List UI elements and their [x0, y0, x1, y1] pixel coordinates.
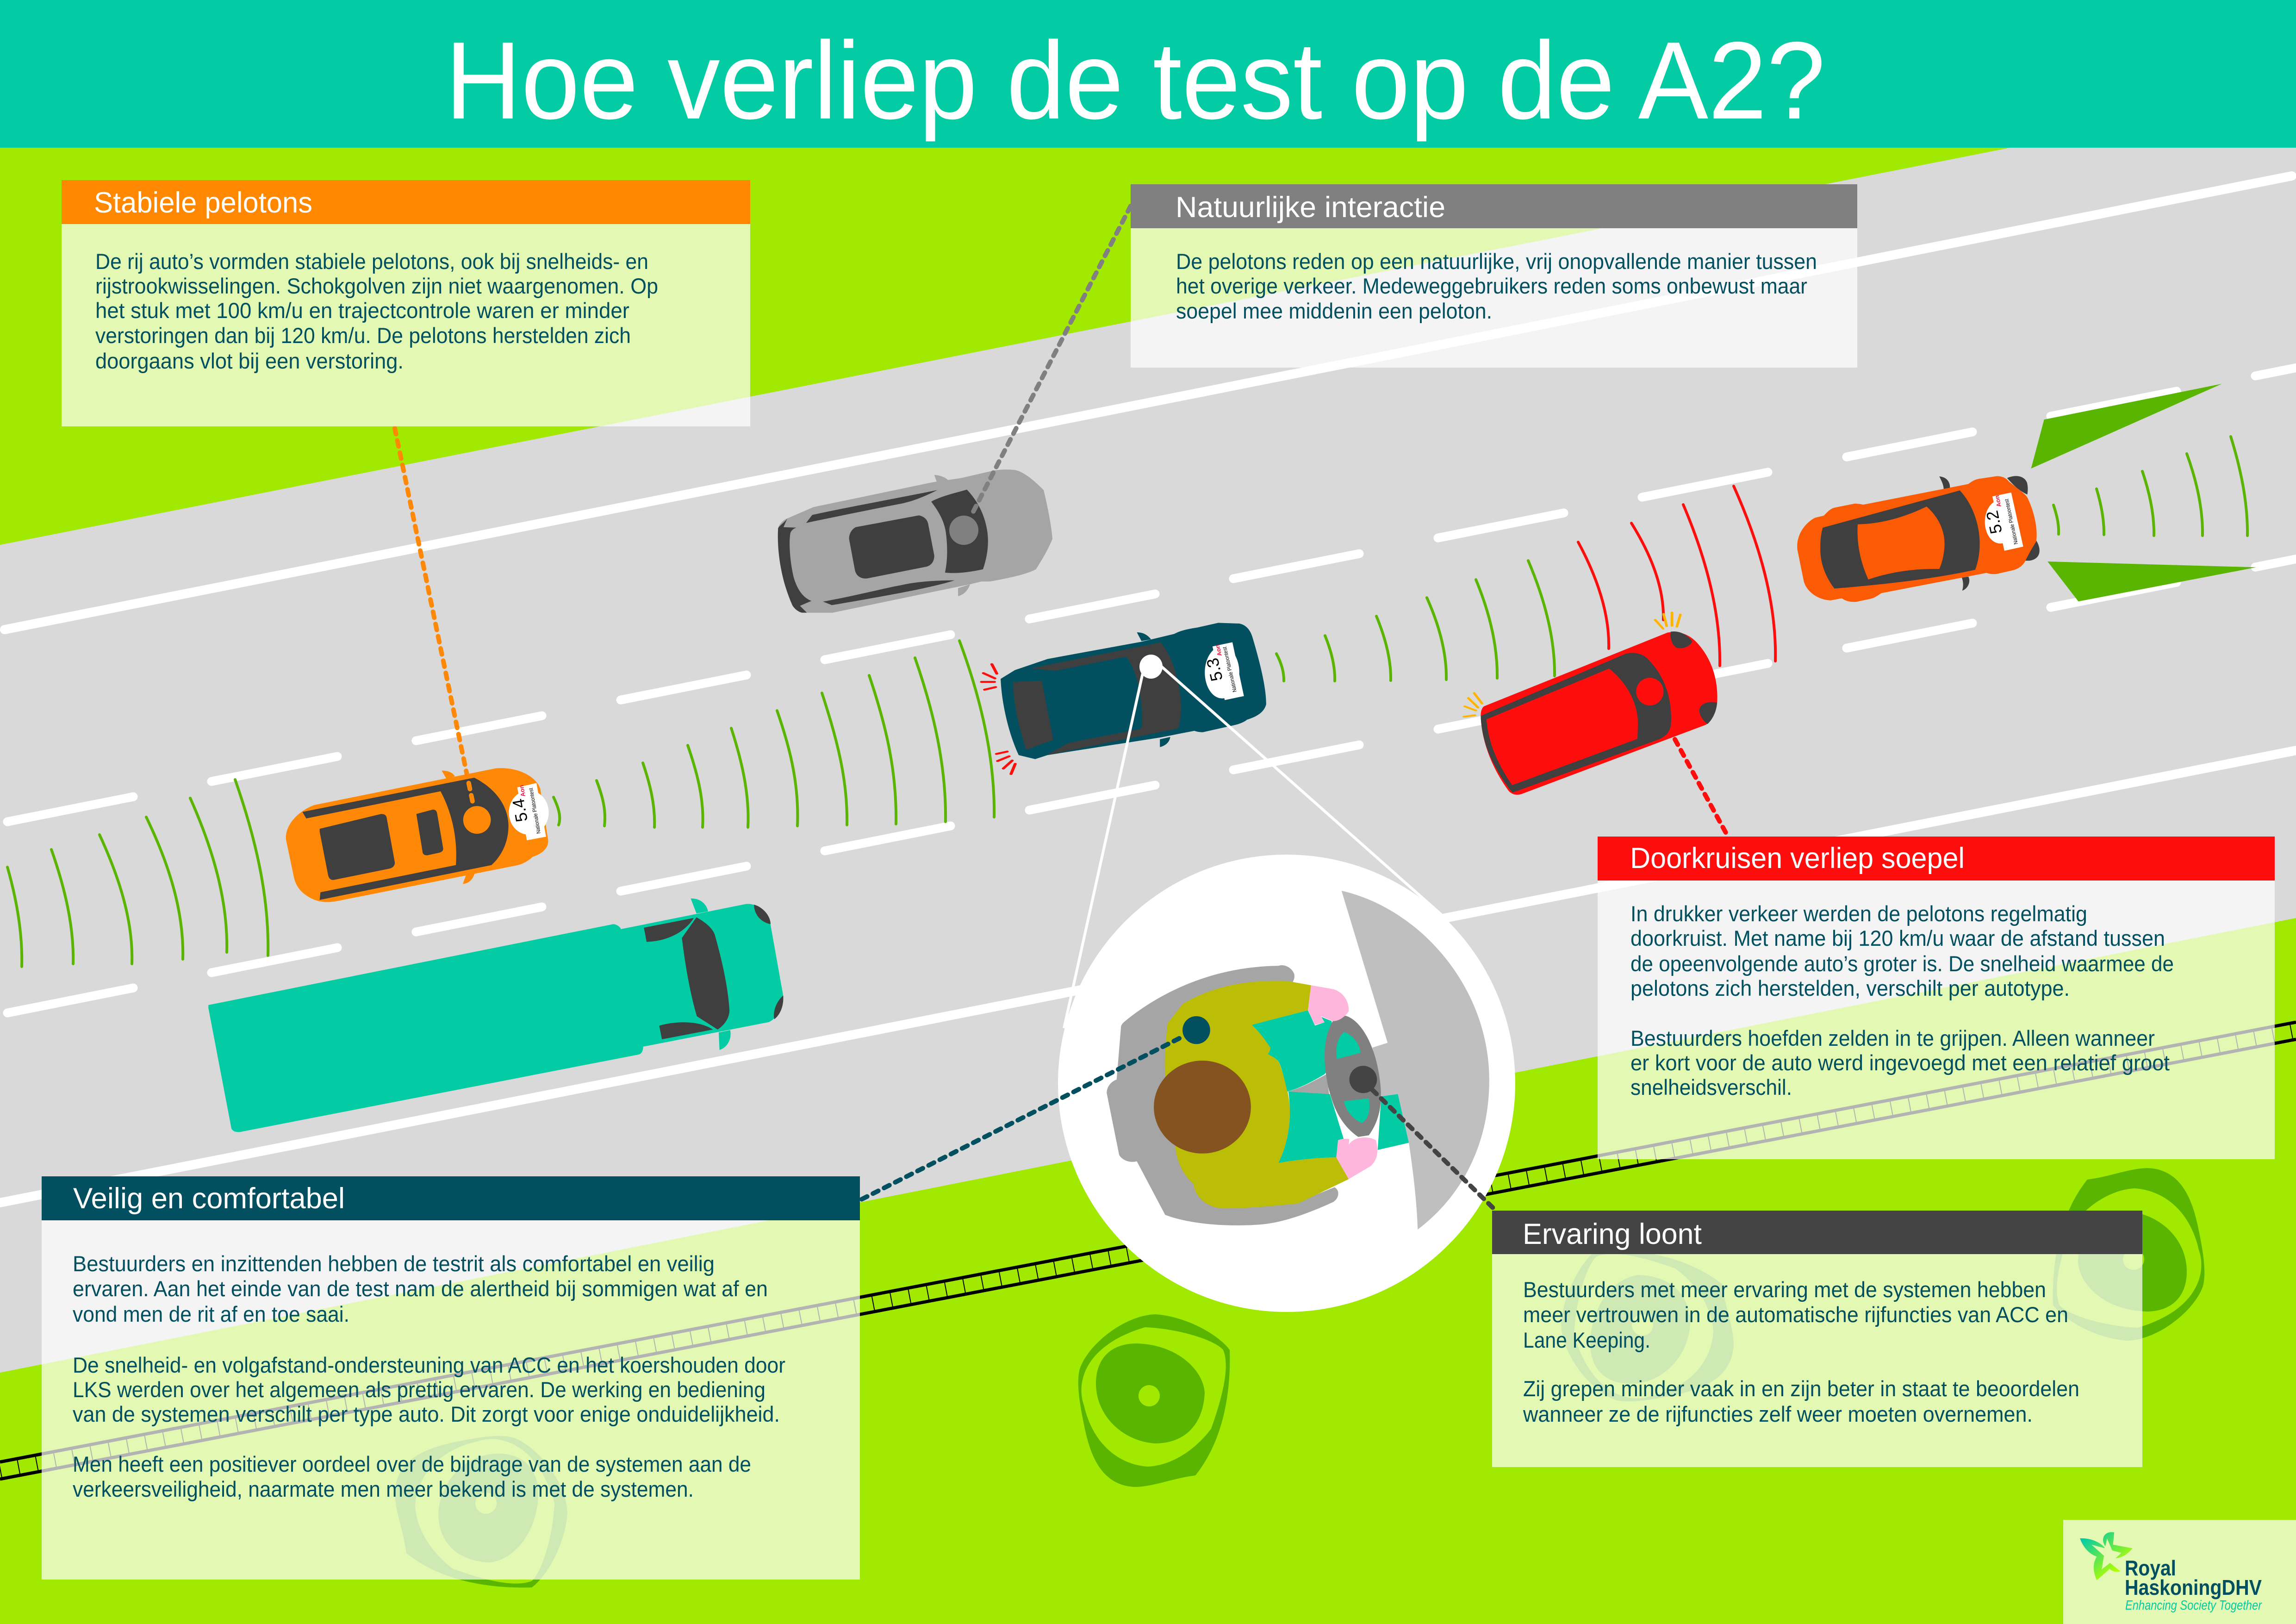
sensor waves: left of orange car: [7, 780, 268, 967]
vehicle: orange car 5.4: 5.4: [509, 797, 531, 824]
vehicle: orange car 5.4: Nationale Platoontest: [528, 787, 542, 834]
panel: natuurlijke interactie: soepel mee middenin een peloton.: [1176, 299, 1492, 323]
panel: stabiele pelotons: Stabiele pelotons: [94, 187, 312, 219]
panel: veilig en comfortabel: ervaren. Aan het einde van de test nam de alertheid bij sommigen wat af en: [73, 1276, 768, 1301]
road surface: [0, 91, 2296, 1373]
road markings: [0, 176, 2296, 1203]
warning waves: red: [1578, 486, 1775, 666]
leader line: stabiele pelotons: [395, 428, 473, 804]
railway fence: [0, 1022, 2296, 1479]
panel: doorkruisen verliep soepel: snelheidsverschil.: [1630, 1075, 1792, 1099]
sensor waves: front of lead car: [2053, 437, 2247, 536]
tree 4: [2053, 1168, 2204, 1341]
panel: ervaring loont: Bestuurders met meer ervaring met de systemen hebben: [1523, 1277, 2046, 1302]
logo: Royal HaskoningDHV: Enhancing Society Together: [2125, 1598, 2262, 1613]
panel: veilig en comfortabel: De snelheid- en volgafstand-ondersteuning van ACC en het koershouden door: [73, 1353, 785, 1377]
panel: doorkruisen verliep soepel: doorkruist. Met name bij 120 km/u waar de afstand tussen: [1630, 926, 2165, 950]
panel: ervaring loont: wanneer ze de rijfuncties zelf weer moeten overnemen.: [1523, 1402, 2033, 1426]
panel: ervaring loont: [1492, 1211, 2142, 1467]
logo: Royal HaskoningDHV: [2063, 1520, 2296, 1624]
panel: doorkruisen verliep soepel: pelotons zich herstelden, verschilt per autotype.: [1630, 976, 2070, 1000]
panel: veilig en comfortabel: Veilig en comfortabel: [73, 1182, 345, 1215]
leader line: doorkruisen: [1675, 739, 1728, 836]
panel: doorkruisen verliep soepel: er kort voor de auto werd ingevoegd met een relatief groot: [1630, 1050, 2170, 1075]
panel: stabiele pelotons: [62, 180, 750, 426]
detail circle: driver inside car: [1058, 855, 1515, 1312]
callout origin dot on teal car: [1139, 655, 1163, 679]
vehicle: orange car 5.4: [286, 768, 549, 902]
vehicle: red car crossing: [1464, 612, 1717, 795]
vehicle: teal car 5.3: Nationale Platoontest: [1221, 646, 1238, 693]
panel: natuurlijke interactie: Natuurlijke interactie: [1176, 191, 1445, 224]
panel: doorkruisen verliep soepel: [1598, 837, 2275, 1159]
panel: doorkruisen verliep soepel: de opeenvolgende auto’s groter is. De snelheid waarmee de: [1630, 951, 2174, 976]
panel: veilig en comfortabel: verkeersveiligheid, naarmate men meer bekend is met de systemen.: [73, 1477, 694, 1501]
vehicle: teal car 5.3: [982, 623, 1266, 774]
panel: veilig en comfortabel: Bestuurders en inzittenden hebben de testrit als comfortabel en veilig: [73, 1251, 715, 1276]
panel: doorkruisen verliep soepel: In drukker verkeer werden de pelotons regelmatig: [1630, 901, 2087, 926]
vehicle: teal car 5.3: 5.3: [1203, 656, 1226, 683]
logo: Royal HaskoningDHV: HaskoningDHV: [2125, 1575, 2262, 1599]
panel: natuurlijke interactie: het overige verkeer. Medeweggebruikers reden soms onbewust maar: [1176, 274, 1807, 298]
vehicle: lead orange car 5.2 with sensor cones: Nationale Platoontest: [2003, 498, 2019, 545]
panel: doorkruisen verliep soepel: Doorkruisen verliep soepel: [1630, 842, 1965, 874]
sensor waves: orange car to teal car: [554, 641, 994, 827]
vehicle: orange car 5.4: Aon: [518, 785, 527, 797]
vehicle: grey car: [778, 469, 1052, 612]
vehicle: truck: [208, 899, 783, 1132]
panel: ervaring loont: Zij grepen minder vaak in en zijn beter in staat te beoordelen: [1523, 1376, 2079, 1401]
panel: ervaring loont: Ervaring loont: [1523, 1218, 1702, 1250]
panel: veilig en comfortabel: LKS werden over het algemeen als prettig ervaren. De werking en bediening: [73, 1377, 765, 1402]
title banner: Hoe verliep de test op de A2?: [445, 19, 1825, 142]
leader line: natuurlijke interactie: [973, 206, 1131, 512]
tree 2: [395, 1436, 567, 1587]
panel: stabiele pelotons: De rij auto’s vormden stabiele pelotons, ook bij snelheids- en: [95, 249, 648, 274]
vehicle: teal car 5.3: Aon: [1214, 644, 1223, 657]
title banner: [0, 0, 2296, 148]
vehicle: lead orange car 5.2 with sensor cones: 5.2: [1982, 509, 2006, 536]
vehicle: lead orange car 5.2 with sensor cones: [1797, 384, 2256, 602]
panel: natuurlijke interactie: [1131, 184, 1857, 368]
panel: stabiele pelotons: verstoringen dan bij 120 km/u. De pelotons herstelden zich: [95, 323, 631, 348]
panel: veilig en comfortabel: [42, 1176, 860, 1580]
leader line: ervaring loont: [1372, 1090, 1494, 1209]
sensor waves: teal car to red car: [1276, 561, 1555, 681]
panel: ervaring loont: Lane Keeping.: [1523, 1328, 1650, 1352]
vehicle: lead orange car 5.2 with sensor cones: Aon: [1993, 495, 2003, 507]
panel: stabiele pelotons: doorgaans vlot bij een verstoring.: [95, 349, 404, 373]
panel: natuurlijke interactie: De pelotons reden op een natuurlijke, vrij onopvallende manier tussen: [1176, 249, 1817, 274]
tree 1: [1078, 1314, 1230, 1487]
panel: veilig en comfortabel: vond men de rit af en toe saai.: [73, 1302, 349, 1326]
callout lines from dot to detail circle: [1064, 667, 1443, 1028]
panel: doorkruisen verliep soepel: Bestuurders hoefden zelden in te grijpen. Alleen wanneer: [1630, 1026, 2155, 1050]
panel: ervaring loont: meer vertrouwen in de automatische rijfuncties van ACC en: [1523, 1302, 2068, 1327]
panel: stabiele pelotons: het stuk met 100 km/u en trajectcontrole waren er minder: [95, 298, 629, 323]
panel: veilig en comfortabel: van de systemen verschilt per type auto. Dit zorgt voor enige onduidelijkheid.: [73, 1402, 780, 1426]
panel: veilig en comfortabel: Men heeft een positiever oordeel over de bijdrage van de systemen aan de: [73, 1452, 751, 1476]
leader line: veilig en comfortabel: [859, 1038, 1179, 1200]
logo: Royal HaskoningDHV: Royal: [2125, 1556, 2176, 1580]
panel: stabiele pelotons: rijstrookwisselingen. Schokgolven zijn niet waargenomen. Op: [95, 274, 658, 298]
tree 3: [1561, 1250, 1734, 1401]
